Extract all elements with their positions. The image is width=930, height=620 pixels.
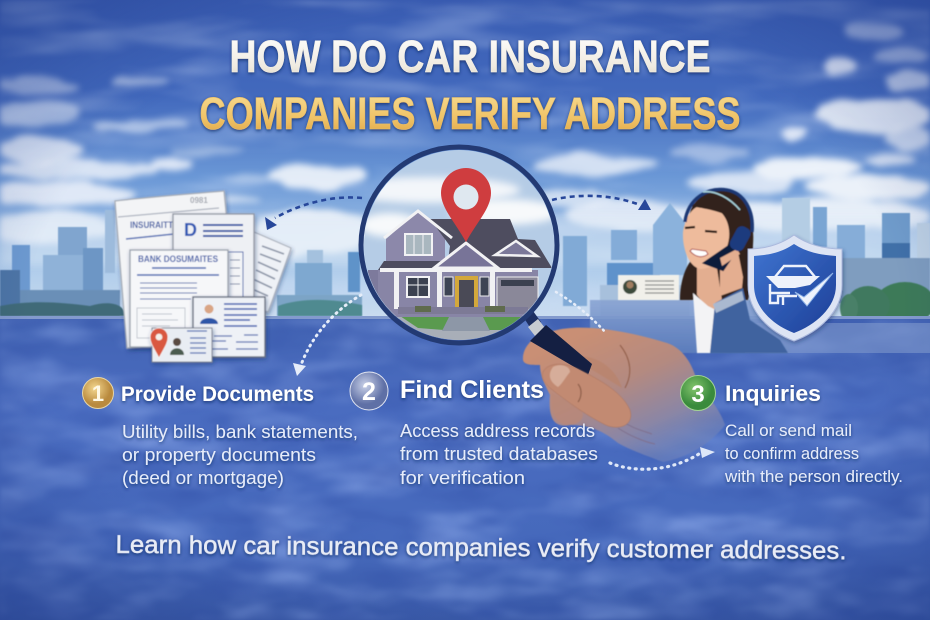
body 3: to confirm address <box>725 445 859 463</box>
agent neck <box>697 262 722 315</box>
hand behind handle <box>523 328 725 462</box>
heading 3: Inquiries <box>725 381 821 406</box>
document: insurance form: INSURAITT <box>130 220 173 231</box>
document: insurance form <box>115 191 227 348</box>
house: main roof <box>430 219 552 268</box>
body 3: with the person directly. <box>724 468 903 486</box>
house: garage <box>497 277 538 310</box>
step 3 <box>680 376 903 486</box>
document: bank documents: BANK DOSUMAITES <box>138 254 218 265</box>
agent hair <box>680 190 753 300</box>
agent hand and phone <box>720 247 743 296</box>
card: person ID <box>193 297 265 357</box>
body 1: Utility bills, bank statements, <box>122 421 358 442</box>
title <box>200 31 740 139</box>
check mark <box>795 273 833 306</box>
title line 2: COMPANIES VERIFY ADDRESS <box>200 88 740 139</box>
arrow: dotted curve from lens <box>556 292 606 333</box>
badge 1: 1 <box>92 381 104 406</box>
card: location ID <box>150 328 212 362</box>
house: columns <box>394 272 495 309</box>
body 2: from trusted databases <box>400 443 598 464</box>
document: right tilted sheet <box>240 232 291 312</box>
body 1: (deed or mortgage) <box>122 467 284 488</box>
house: wall <box>368 270 533 317</box>
badge 1 <box>82 378 114 408</box>
arrow: dashed to agent <box>552 196 651 210</box>
icon: red location pin <box>441 168 491 242</box>
house: side windows <box>444 277 489 296</box>
house: base <box>398 307 528 314</box>
agent: woman on phone <box>680 190 788 353</box>
document: bank documents <box>130 250 228 347</box>
body 2: Access address records <box>400 420 595 441</box>
background: sky <box>0 0 930 320</box>
arrow: dashed to documents <box>265 197 362 230</box>
background: treeline <box>0 282 930 324</box>
body 1: or property documents <box>122 444 316 465</box>
body 3: Call or send mail <box>725 422 852 440</box>
document: letter with logo: D <box>184 220 197 240</box>
arrow: dotted curve to step 1 <box>293 295 361 376</box>
agent shirt <box>693 293 722 353</box>
icon: stack of documents <box>115 191 291 362</box>
body 1 <box>122 421 358 488</box>
house: upper storey <box>386 213 445 261</box>
badge 3 <box>680 376 716 410</box>
arrow: dotted curve to step 3 <box>610 447 715 469</box>
house: lower window <box>406 276 430 298</box>
background: pale haze at horizon <box>0 215 930 265</box>
agent headset <box>685 190 752 232</box>
body 3 <box>724 422 903 486</box>
document: letter with logo <box>173 214 254 304</box>
house: porch beam <box>380 268 532 272</box>
magnifier handle <box>524 311 592 375</box>
house: gable <box>434 243 498 268</box>
badge 3: 3 <box>691 381 705 408</box>
background: high wispy clouds <box>0 0 930 320</box>
badge 2: 2 <box>362 378 376 406</box>
background: city skyline <box>0 198 930 320</box>
agent jacket <box>710 288 788 353</box>
badge 2 <box>350 372 388 410</box>
title line 1: HOW DO CAR INSURANCE <box>230 31 710 82</box>
car glyph <box>766 266 820 305</box>
walkway <box>442 317 490 331</box>
document: insurance form: 0981 <box>190 196 208 205</box>
house: upper window <box>404 233 433 256</box>
icon: shield with car and check <box>748 235 842 341</box>
lawn <box>400 316 526 330</box>
heading 1: Provide Documents <box>121 383 314 406</box>
heading 2: Find Clients <box>400 376 544 404</box>
magnifier <box>340 145 592 375</box>
panel: lower pale slab behind agent <box>590 300 930 353</box>
agent face <box>683 205 729 269</box>
magnifier lens scene <box>364 150 554 340</box>
footer caption: Learn how car insurance companies verify customer addresses. <box>115 531 847 565</box>
house: door <box>455 276 478 309</box>
background: clouds <box>0 24 930 257</box>
hand: thumb over handle <box>542 364 631 427</box>
body 2 <box>400 420 598 488</box>
card: contact chip <box>618 275 679 300</box>
magnifier rim <box>361 147 557 343</box>
background: water <box>0 316 930 620</box>
body 2: for verification <box>400 467 525 488</box>
step 2 <box>350 372 598 488</box>
step 1 <box>82 378 358 488</box>
